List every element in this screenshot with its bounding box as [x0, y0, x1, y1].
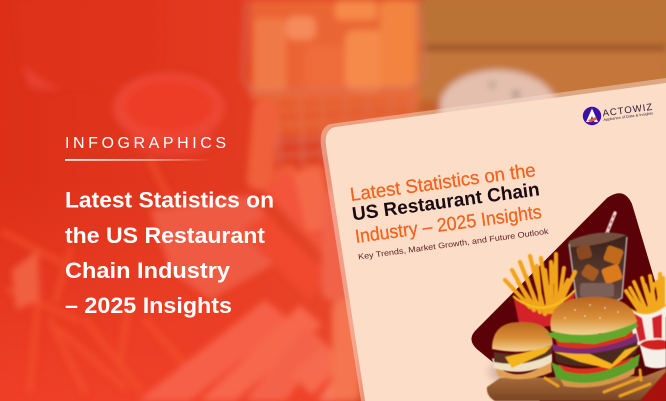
red corner beneath the tray: [640, 372, 666, 401]
card face: [326, 83, 666, 401]
main heading: – 2025 Insights: [65, 293, 232, 318]
icon: right fries carton: [625, 274, 666, 345]
icon: wooden serving board: [487, 368, 666, 401]
logo: Actowiz: ACTOWIZ: [602, 102, 653, 119]
icon: left fries carton: [505, 254, 575, 328]
icon: sauce cup: [639, 338, 666, 368]
card heading: [349, 160, 550, 261]
dip bowl: [113, 73, 225, 156]
main heading: Latest Statistics on: [65, 188, 274, 212]
main heading: the US Restaurant: [65, 223, 266, 248]
glass base: [22, 66, 60, 90]
icon: loose fries on board: [545, 370, 650, 396]
label: INFOGRAPHICS: INFOGRAPHICS: [65, 135, 226, 152]
icon: cola glass: [568, 213, 627, 306]
logo: Actowiz: Appliance of Data & Insights: [603, 111, 653, 122]
food soft shadow: [490, 356, 650, 388]
card outer translucent border: [321, 78, 666, 401]
underline rule: [65, 159, 212, 161]
main heading: [65, 188, 274, 318]
icon: large burger: [546, 297, 640, 388]
card heading: Latest Statistics on the: [349, 160, 537, 206]
card heading: Key Trends, Market Growth, and Future Outlook: [358, 227, 550, 261]
large fries at bottom: [138, 168, 362, 401]
wood table planks: [410, 0, 666, 130]
card: report cover: [321, 78, 666, 401]
food illustration: [487, 213, 666, 401]
main heading: Chain Industry: [65, 258, 231, 283]
white bowl: [440, 70, 556, 142]
card heading: Industry – 2025 Insights: [354, 202, 543, 248]
glass on the table: [14, 0, 160, 88]
dark maroon rounded triangle: [471, 193, 666, 401]
icon: small burger: [492, 322, 553, 379]
card heading: US Restaurant Chain: [351, 179, 541, 225]
wire basket: [243, 0, 426, 165]
fries in wire basket: [250, 0, 419, 100]
logo: Actowiz: [583, 102, 653, 125]
fries under basket: [246, 99, 331, 226]
carrots and salad on the left: [3, 160, 190, 392]
